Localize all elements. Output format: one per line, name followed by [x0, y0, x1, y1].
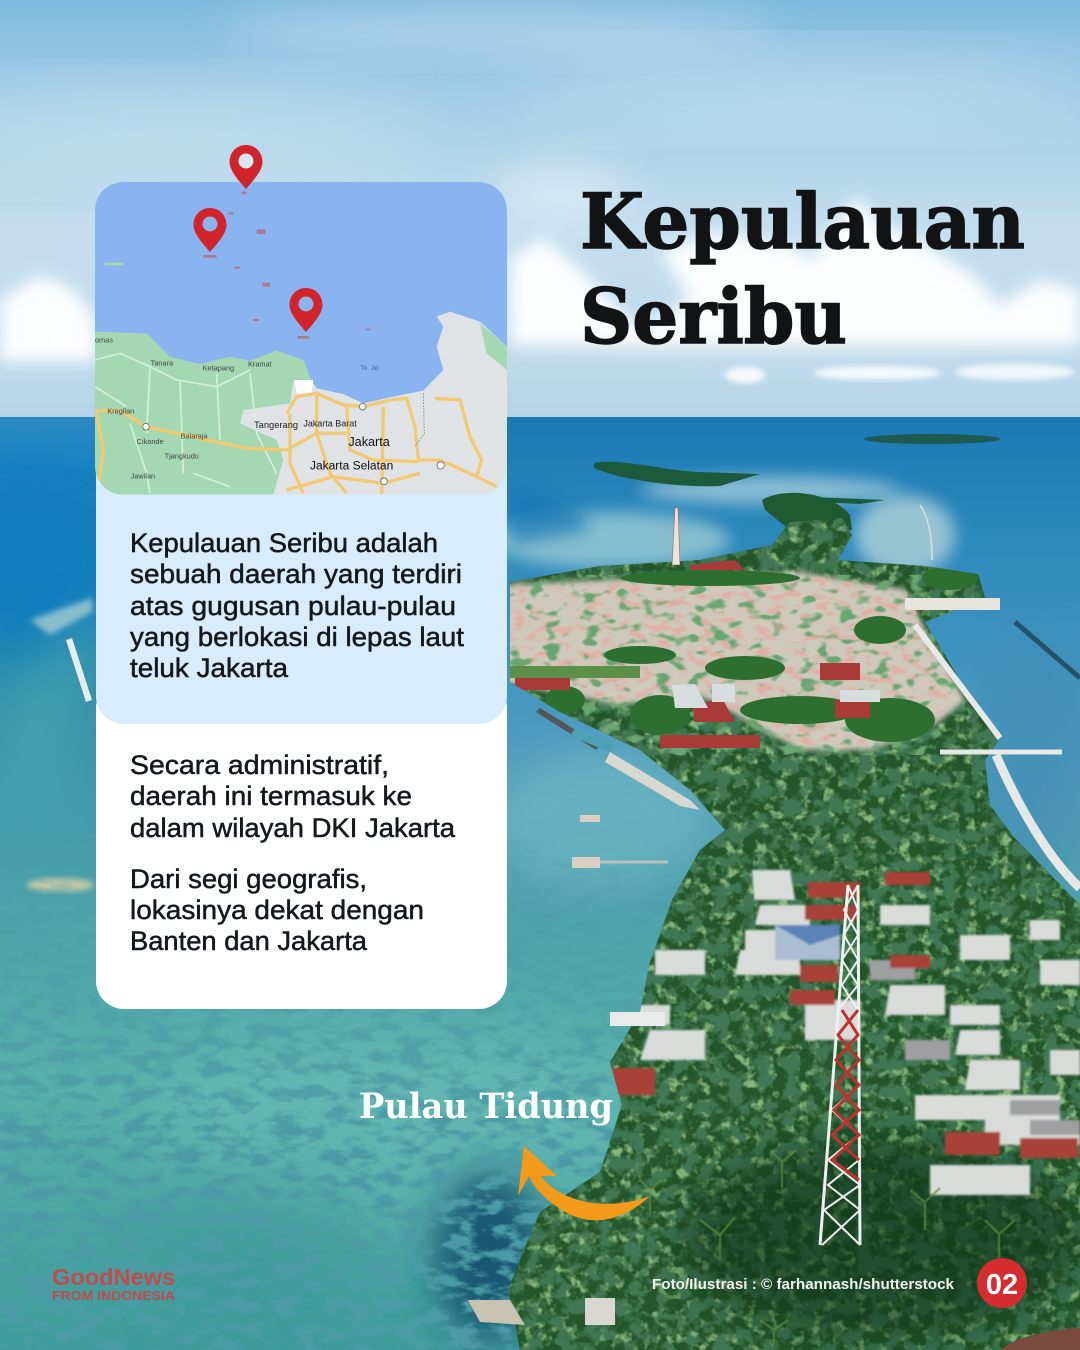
description text: atas gugusan pulau-pulau — [130, 591, 456, 621]
white roofs — [672, 684, 880, 708]
map labels: Jawilan — [131, 472, 155, 481]
map pin 3 — [290, 288, 322, 332]
text: geography: Banten dan Jakarta — [130, 926, 368, 956]
map labels: Cikande — [137, 437, 164, 446]
white info card — [96, 680, 507, 1009]
seawall — [575, 505, 1080, 888]
text: geography: Dari segi geografis, — [130, 864, 367, 894]
title: Kepulauan — [580, 177, 1025, 266]
tall lattice tower — [820, 885, 860, 1245]
map labels: Jakarta Selatan — [310, 459, 393, 473]
secondary text: administrative: daerah ini termasuk ke — [130, 781, 412, 811]
arrow pointing to Pulau Tidung — [518, 1146, 650, 1220]
land grey — [240, 312, 507, 495]
trees in village — [545, 566, 978, 742]
shore objects — [468, 708, 1080, 1350]
yellow highways — [95, 393, 497, 495]
sea left — [0, 417, 1080, 1350]
small tower far — [672, 508, 680, 565]
road shields — [143, 403, 444, 485]
logo: GoodNews from Indonesia: FROM INDONESIA — [52, 1289, 175, 1303]
small white roads — [95, 353, 277, 493]
map labels: Kragilan — [107, 406, 134, 415]
description text: Kepulauan Seribu adalah — [130, 528, 438, 558]
map labels: Ketapang — [203, 364, 234, 373]
distant islands — [594, 434, 1000, 530]
map labels: Tk. Jkt — [361, 366, 379, 372]
secondary text: administrative — [130, 750, 456, 843]
foreground houses — [612, 870, 1080, 1195]
village north — [500, 572, 965, 750]
map pin 1 — [230, 145, 262, 189]
clouds — [0, 8, 1080, 383]
map labels: Kramat — [248, 360, 272, 369]
map labels: Tangerang — [254, 420, 298, 430]
map labels: Tjangkudu — [165, 452, 199, 461]
red roofs — [515, 560, 870, 748]
secondary text: administrative: dalam wilayah DKI Jakarta — [130, 813, 456, 843]
secondary text: administrative: Secara administratif, — [130, 750, 389, 780]
map labels — [95, 336, 393, 481]
island — [500, 500, 1080, 1350]
description text — [130, 528, 465, 683]
text: geography — [130, 864, 424, 956]
light-blue panel with map and description — [95, 182, 507, 724]
sky — [0, 0, 1080, 420]
palm texture — [640, 1150, 1015, 1344]
map labels: Tanara — [151, 359, 174, 368]
description text: sebuah daerah yang terdiri — [130, 559, 462, 589]
page number badge — [977, 1258, 1027, 1308]
map — [95, 182, 507, 495]
shallow water — [0, 470, 1080, 1350]
description text: teluk Jakarta — [130, 653, 289, 683]
photo credit: Foto/Ilustrasi : © farhannash/shutterstock — [652, 1276, 955, 1293]
title: Seribu — [580, 272, 847, 361]
land green — [95, 332, 323, 495]
map pin 2 — [194, 208, 226, 252]
sea right — [506, 417, 1080, 866]
map labels: Balaraja — [181, 432, 208, 441]
map labels: omas — [95, 336, 113, 345]
map labels: Jakarta Barat — [303, 419, 357, 429]
logo: GoodNews from Indonesia — [52, 1264, 175, 1303]
map labels: Jakarta — [348, 435, 391, 449]
description text: yang berlokasi di lepas laut — [130, 622, 465, 652]
text: geography: lokasinya dekat dengan — [130, 895, 424, 925]
label: Pulau Tidung: Pulau Tidung — [359, 1086, 613, 1127]
page number badge: 02 — [986, 1269, 1018, 1301]
islands — [203, 192, 371, 339]
title — [580, 177, 1025, 361]
logo: GoodNews from Indonesia: GoodNews — [52, 1264, 175, 1290]
